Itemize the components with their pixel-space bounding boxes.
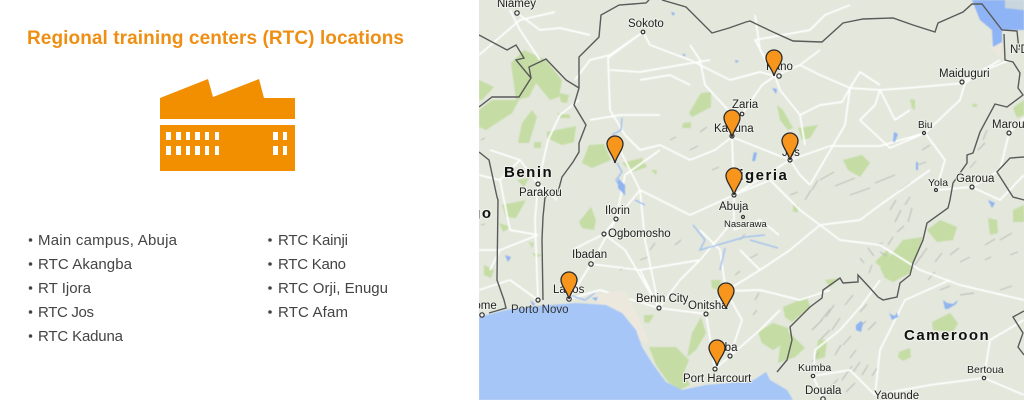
icon: factory building bbox=[160, 79, 295, 171]
list: right column of locations: RTC Orji, Enugu bbox=[278, 280, 388, 297]
rivers and lakes bbox=[560, 118, 778, 300]
place labels: Parakou bbox=[519, 187, 562, 199]
map of Nigeria and neighbours bbox=[451, 0, 1024, 400]
place labels bbox=[451, 0, 1024, 400]
sandy coastline bbox=[592, 42, 1002, 345]
green parks and reserves bbox=[479, 50, 1024, 390]
pin: RTC Kainji bbox=[607, 136, 623, 163]
list: left column of locations: Main campus, Abuja bbox=[38, 232, 178, 249]
place labels: Kumba bbox=[798, 362, 831, 374]
road network bbox=[479, 5, 1024, 399]
place labels: Ilorin bbox=[605, 205, 630, 217]
place labels: Port Harcourt bbox=[683, 373, 752, 385]
ocean: Gulf of Guinea bbox=[479, 303, 793, 400]
place labels: Biu bbox=[918, 120, 932, 131]
place labels: Garoua bbox=[956, 173, 995, 185]
place labels: Cameroon bbox=[904, 327, 990, 344]
pin: RTC Kaduna bbox=[724, 110, 740, 137]
list: left column of locations: RTC Kaduna bbox=[38, 328, 124, 345]
pin: RTC Akangba, Lagos bbox=[561, 272, 577, 299]
list: right column of locations: RTC Afam bbox=[278, 304, 348, 321]
title: Regional training centers (RTC) locations bbox=[27, 28, 404, 49]
place labels: Kano bbox=[766, 61, 793, 73]
pin: Main campus, Abuja bbox=[726, 168, 742, 195]
place labels: Benin City bbox=[636, 293, 689, 305]
place labels: Porto Novo bbox=[511, 304, 569, 316]
place labels: Nasarawa bbox=[724, 219, 767, 230]
place labels: Lagos bbox=[553, 284, 585, 296]
country borders bbox=[479, 0, 1024, 372]
place labels: Ogbomosho bbox=[608, 228, 671, 240]
place labels: Benin bbox=[504, 164, 553, 181]
list: left column of locations: RT Ijora bbox=[38, 280, 92, 297]
pin: RTC Orji, Enugu bbox=[718, 283, 734, 309]
pin: RTC Kano bbox=[766, 50, 782, 76]
place labels: Aba bbox=[717, 342, 738, 354]
mountain terrain shading bbox=[481, 127, 1018, 392]
list: left column of locations: RTC Jos bbox=[38, 304, 94, 321]
list: left column of locations: RTC Akangba bbox=[38, 256, 133, 273]
place labels: Abuja bbox=[719, 201, 749, 213]
panel: RTC information bbox=[0, 0, 479, 400]
Lake Chad bbox=[972, 0, 1024, 47]
place labels: Bertoua bbox=[967, 364, 1004, 376]
list: right column of locations: RTC Kano bbox=[278, 256, 346, 273]
place labels: Nigeria bbox=[727, 167, 788, 184]
place labels: Onitsha bbox=[688, 300, 728, 312]
place labels: Sokoto bbox=[628, 18, 664, 30]
list: right column of locations: RTC Kainji bbox=[278, 232, 348, 249]
place labels: Yola bbox=[928, 177, 948, 189]
place labels: Ibadan bbox=[572, 249, 607, 261]
pin: RTC Jos bbox=[782, 133, 798, 160]
place labels: Kaduna bbox=[714, 123, 754, 135]
place labels: Lome bbox=[468, 300, 497, 312]
place labels: Zaria bbox=[732, 99, 759, 111]
place labels: Jos bbox=[782, 147, 800, 159]
place labels: Douala bbox=[805, 385, 842, 397]
pin: RTC Afam bbox=[709, 340, 725, 366]
place labels: Maiduguri bbox=[939, 68, 990, 80]
list: left column of locations bbox=[29, 232, 178, 345]
list: right column of locations bbox=[268, 232, 388, 321]
place labels: Togo bbox=[451, 205, 493, 222]
